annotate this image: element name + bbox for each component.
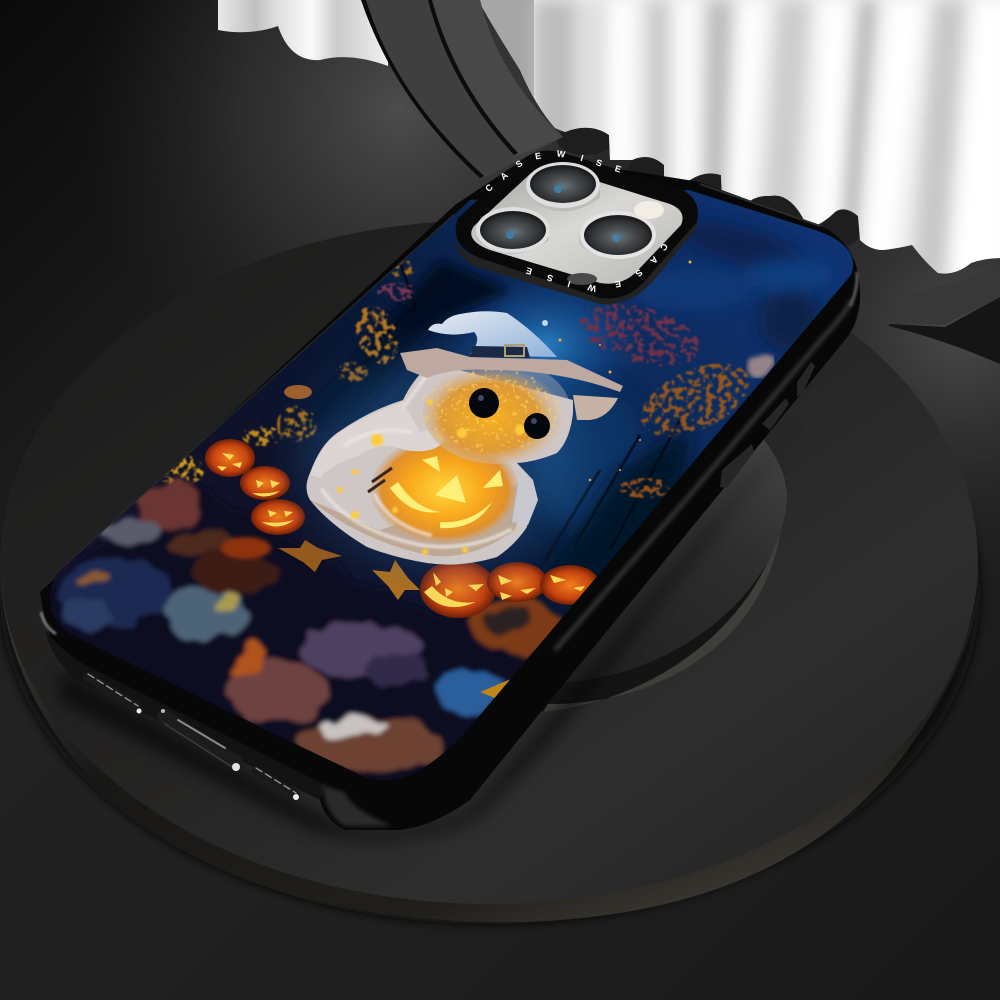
lens left	[476, 207, 550, 254]
lens right	[579, 211, 656, 259]
phone shadow	[60, 420, 800, 840]
flash	[634, 201, 664, 219]
dark curved stand arcs	[361, 0, 563, 178]
jack o lantern face	[390, 456, 503, 528]
side buttons	[720, 362, 815, 488]
right stand bracket	[889, 268, 1000, 364]
casewise text top: A	[498, 170, 510, 182]
casewise text bottom: E	[614, 279, 622, 289]
casewise text top: I	[579, 153, 585, 163]
ambers	[558, 260, 692, 481]
white curtain	[218, 0, 1000, 290]
casewise text bottom: S	[633, 267, 645, 279]
left tree foliage	[156, 259, 417, 486]
witch hat	[400, 311, 623, 392]
small pumpkins	[205, 439, 600, 618]
sensor	[567, 273, 597, 285]
casewise text bottom: A	[648, 254, 660, 266]
phone case body	[40, 155, 860, 830]
camera plate	[471, 168, 683, 284]
ghost sparkles	[420, 368, 560, 452]
casewise text top: S	[595, 157, 603, 169]
foreground rocks and leaves	[52, 475, 564, 776]
casewise text bottom: I	[566, 279, 572, 289]
casewise text bottom: W	[586, 282, 597, 294]
ghost eyes	[469, 388, 550, 439]
ghost swirl folds	[322, 370, 510, 547]
sky clouds	[630, 211, 835, 350]
lens top	[526, 162, 600, 212]
moon glow	[452, 280, 632, 402]
bottom ports	[88, 674, 299, 800]
casewise text top: E	[614, 163, 622, 175]
camera module	[454, 148, 698, 304]
casewise text top	[483, 148, 622, 194]
casewise text bottom: S	[546, 272, 554, 284]
right tree foliage	[579, 303, 750, 499]
casewise text bottom: E	[525, 265, 533, 277]
casewise text bottom: C	[658, 241, 670, 253]
casewise text top: C	[483, 182, 495, 194]
casewise text top: W	[556, 148, 566, 160]
ghost ear	[573, 395, 618, 420]
casewise text top: S	[514, 158, 524, 170]
casewise text bottom	[525, 241, 670, 294]
small upper disc	[520, 380, 787, 712]
phone artwork	[50, 190, 854, 780]
maple leaves	[278, 540, 518, 702]
dark forest	[290, 260, 690, 600]
ghost body	[305, 355, 618, 565]
large disc platform	[0, 220, 980, 924]
dark shadow blobs under curtain	[557, 125, 862, 246]
casewise text top: E	[534, 151, 542, 161]
